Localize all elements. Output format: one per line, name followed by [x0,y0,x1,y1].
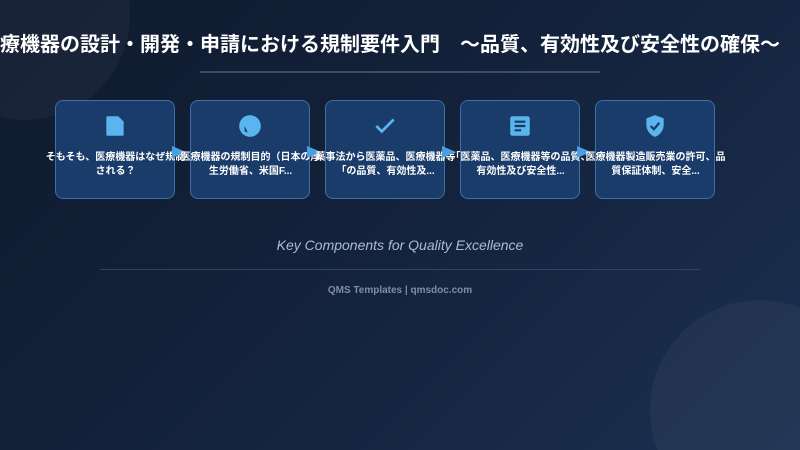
arrow 2 [307,146,321,158]
card 5 [595,100,715,199]
icon: check [376,118,394,134]
card 3 [325,100,445,199]
icon: list [510,116,530,136]
arrow 1 [172,146,186,158]
card 2: 医療機器の規制目的（日本の厚生労働省、米国F... [180,152,320,177]
card 4: 「医薬品、医療機器等の品質、有効性及び安全性... [450,152,590,177]
subtitle: Key Components for Quality Excellence [277,237,523,253]
card 2 [190,100,310,199]
card 3: 薬事法から医薬品、医療機器等「の品質、有効性及... [316,152,456,177]
icon: document [106,116,124,136]
arrow 4 [577,146,591,158]
footer: QMS Templates | qmsdoc.com [328,285,472,296]
arrow 3 [442,146,456,158]
card 5: 医療機器製造販売業の許可、品質保証体制、安全... [586,152,726,177]
icon: globe [239,115,261,137]
card 4 [460,100,580,199]
card 1 [55,100,175,199]
icon: shield [646,115,664,137]
card 1: そもそも、医療機器はなぜ規制される？ [46,152,185,177]
